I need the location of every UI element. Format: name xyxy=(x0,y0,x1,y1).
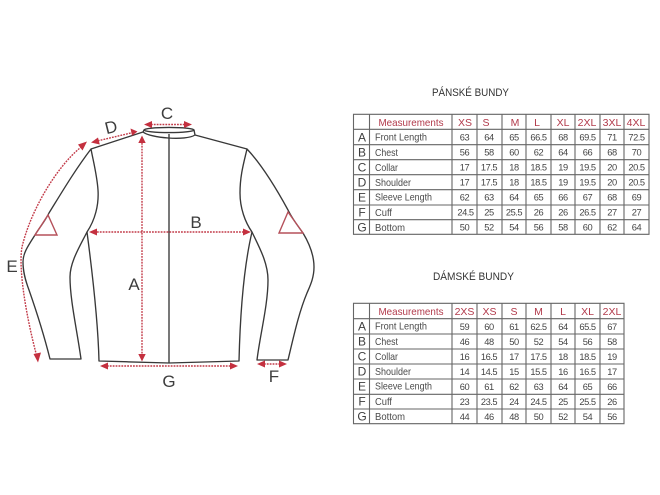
women's row C: 16 xyxy=(460,352,469,362)
men's row D: D xyxy=(358,176,367,190)
men's row C xyxy=(358,160,645,174)
left elbow triangle xyxy=(35,215,57,235)
women's row G: G xyxy=(357,410,367,424)
women's row F: 24.5 xyxy=(530,397,547,407)
women's row F: 23.5 xyxy=(481,397,497,407)
men's row C: 18.5 xyxy=(530,162,547,172)
jacket collar xyxy=(143,127,195,138)
men's header row: Measurements xyxy=(378,117,444,129)
men's row A: 69.5 xyxy=(579,132,596,142)
label D: D xyxy=(103,117,119,138)
women's row B: 54 xyxy=(558,337,568,347)
women's row E: 64 xyxy=(558,382,568,392)
women's row E: 63 xyxy=(534,382,543,392)
jacket right sleeve xyxy=(240,149,314,360)
heading: men's jackets: PÁNSKÉ BUNDY xyxy=(432,86,510,99)
men's header row: XL xyxy=(557,117,570,129)
women's row C: 17 xyxy=(509,352,519,362)
men's row A: A xyxy=(358,130,366,144)
women's row D: 16.5 xyxy=(579,367,596,377)
label B: B xyxy=(190,213,202,232)
men's row G: G xyxy=(357,220,367,234)
women's row G: Bottom xyxy=(375,411,405,423)
men's row E: 69 xyxy=(632,192,641,202)
women's row A: 62.5 xyxy=(530,322,547,332)
women's header row: L xyxy=(560,306,566,318)
table: women's sizes xyxy=(354,303,624,424)
men's row B: 58 xyxy=(484,148,494,158)
women's row F: 24 xyxy=(509,397,519,407)
women's row A: A xyxy=(358,320,366,334)
women's row A xyxy=(358,320,617,334)
men's row F: 26 xyxy=(534,208,543,218)
women's row E: 61 xyxy=(484,382,494,392)
men's row F: F xyxy=(358,206,366,220)
men's row F: Cuff xyxy=(375,207,392,219)
men's row B: Chest xyxy=(375,147,398,159)
women's row B: Chest xyxy=(375,336,398,348)
men's header row: 2XL xyxy=(578,117,596,129)
men's row B: B xyxy=(358,146,366,160)
measurement arrow F: cuff xyxy=(257,360,287,368)
men's row B: 64 xyxy=(558,148,568,158)
jacket front centre line xyxy=(168,134,170,363)
men's row G: 58 xyxy=(558,222,568,232)
women's row F: 23 xyxy=(460,397,469,407)
men's row C: Collar xyxy=(375,162,398,174)
men's row A: 72.5 xyxy=(628,132,645,142)
women's row A: 67 xyxy=(607,322,617,332)
women's row F: 25.5 xyxy=(579,397,596,407)
women's row B: 46 xyxy=(460,337,469,347)
men's row G: 62 xyxy=(607,222,617,232)
women's row F: 25 xyxy=(558,397,568,407)
men's row C: 17.5 xyxy=(481,162,497,172)
men's row G: 52 xyxy=(484,222,494,232)
men's row G: 56 xyxy=(534,222,543,232)
women's row E: 62 xyxy=(509,382,519,392)
men's row D: 20.5 xyxy=(628,178,645,188)
women's row B: 58 xyxy=(607,337,617,347)
women's row F: 26 xyxy=(607,397,617,407)
women's header row: Measurements xyxy=(378,306,444,318)
women's row G: 48 xyxy=(509,412,519,422)
men's row E: 68 xyxy=(607,192,617,202)
men's row D: 18 xyxy=(509,178,519,188)
men's row A: 71 xyxy=(607,132,617,142)
men's header row: L xyxy=(534,117,540,129)
men's row A: 64 xyxy=(484,132,494,142)
measurement arrow D: shoulder xyxy=(91,128,138,144)
men's header row: S xyxy=(482,117,490,129)
women's header row: S xyxy=(510,306,518,318)
men's row B: 68 xyxy=(607,148,617,158)
women's row B: 56 xyxy=(583,337,592,347)
women's row A: 64 xyxy=(558,322,568,332)
men's row D: 17 xyxy=(460,178,469,188)
women's row A: 61 xyxy=(509,322,519,332)
men's row A: 63 xyxy=(460,132,469,142)
label A: A xyxy=(128,275,140,294)
men's row G: 50 xyxy=(460,222,469,232)
men's row C: 20.5 xyxy=(628,162,645,172)
women's row G: 50 xyxy=(534,412,543,422)
men's row A: 66.5 xyxy=(530,132,547,142)
men's row F xyxy=(358,206,641,220)
men's row B: 56 xyxy=(460,148,469,158)
women's row A: 60 xyxy=(484,322,494,332)
women's row F: F xyxy=(358,394,366,408)
women's row E: 66 xyxy=(607,382,617,392)
men's row D: 19 xyxy=(558,178,568,188)
men's header row: 3XL xyxy=(603,117,621,129)
women's header row: XL xyxy=(581,306,594,318)
women's header row: 2XS xyxy=(455,306,474,318)
women's row B: 48 xyxy=(484,337,494,347)
women's row G xyxy=(357,410,617,424)
women's row F xyxy=(358,394,617,408)
men's row D: Shoulder xyxy=(375,177,411,189)
men's header row: 4XL xyxy=(627,117,645,129)
men's row E: Sleeve Length xyxy=(375,192,432,204)
women's row C: 16.5 xyxy=(481,352,497,362)
women's row B: 50 xyxy=(509,337,519,347)
women's row D: 14.5 xyxy=(481,367,497,377)
men's row E: 65 xyxy=(534,192,543,202)
women's row C: C xyxy=(358,350,367,364)
jacket diagram xyxy=(23,127,314,363)
label F: F xyxy=(269,367,279,386)
measurement arrow E: sleeve length xyxy=(21,142,87,362)
women's row D: 15 xyxy=(509,367,519,377)
women's header row: 2XL xyxy=(603,306,621,318)
women's row C: 19 xyxy=(607,352,617,362)
women's row F: Cuff xyxy=(375,396,392,408)
women's header row: XS xyxy=(482,306,497,318)
men's row E: 64 xyxy=(509,192,519,202)
women's row G: 56 xyxy=(607,412,617,422)
women's row B xyxy=(358,334,617,348)
men's row B: 60 xyxy=(509,148,519,158)
women's row G: 46 xyxy=(484,412,494,422)
men's row G: 60 xyxy=(583,222,592,232)
women's row G: 54 xyxy=(583,412,592,422)
men's row G: 64 xyxy=(632,222,641,232)
women's row E: Sleeve Length xyxy=(375,380,432,392)
men's row C: 19.5 xyxy=(579,162,596,172)
women's row C: 18 xyxy=(558,352,568,362)
women's row D: 17 xyxy=(607,367,617,377)
men's row A xyxy=(358,130,645,144)
men's header row xyxy=(378,117,645,129)
women's row G: 52 xyxy=(558,412,568,422)
men's row G: Bottom xyxy=(375,222,405,234)
women's row A: Front Length xyxy=(375,320,427,332)
men's row F: 25.5 xyxy=(506,208,522,218)
men's header row: M xyxy=(511,117,519,129)
measurement arrow G: bottom xyxy=(100,362,238,370)
women's row E xyxy=(358,380,617,394)
men's row A: 65 xyxy=(509,132,519,142)
women's row D: 15.5 xyxy=(530,367,547,377)
women's row B: B xyxy=(358,334,366,348)
men's row C: 19 xyxy=(558,162,568,172)
men's row B xyxy=(358,146,641,160)
men's row A: Front Length xyxy=(375,132,427,144)
men's row D: 17.5 xyxy=(481,178,497,188)
men's row E: 67 xyxy=(583,192,592,202)
men's row F: 26.5 xyxy=(579,208,596,218)
men's row E xyxy=(358,190,641,204)
men's header row: XS xyxy=(458,117,472,129)
men's row D xyxy=(358,176,645,190)
men's row F: 24.5 xyxy=(457,208,474,218)
women's row D: D xyxy=(358,364,367,378)
men's row F: 25 xyxy=(484,208,494,218)
right elbow triangle xyxy=(279,212,303,233)
women's row E: 60 xyxy=(460,382,469,392)
label E: E xyxy=(6,257,18,276)
men's row B: 70 xyxy=(632,148,641,158)
women's row E: E xyxy=(358,380,366,394)
men's row C: 20 xyxy=(607,162,617,172)
measurement arrow B: chest xyxy=(89,228,251,236)
label G: G xyxy=(162,372,176,391)
men's row C: 18 xyxy=(509,162,519,172)
men's row E: 62 xyxy=(460,192,469,202)
label C: C xyxy=(161,104,173,123)
women's row D: 14 xyxy=(460,367,469,377)
men's row D: 19.5 xyxy=(579,178,596,188)
men's row A: 68 xyxy=(558,132,568,142)
measurement arrow C: collar xyxy=(144,121,192,128)
women's row A: 59 xyxy=(460,322,469,332)
women's row B: 52 xyxy=(534,337,543,347)
women's row C: 18.5 xyxy=(579,352,596,362)
jacket left sleeve xyxy=(23,149,98,359)
men's row D: 20 xyxy=(607,178,617,188)
women's row G: 44 xyxy=(460,412,469,422)
women's row C xyxy=(358,350,617,364)
measurement arrow A: front length xyxy=(138,136,146,362)
men's row B: 66 xyxy=(583,148,592,158)
women's row D: Shoulder xyxy=(375,366,411,378)
men's row C: 17 xyxy=(460,162,469,172)
jacket left body and shoulder xyxy=(87,132,252,363)
men's row F: 27 xyxy=(607,208,617,218)
men's row G: 54 xyxy=(509,222,519,232)
heading: women's jackets: DÁMSKÉ BUNDY xyxy=(433,270,515,283)
women's row D xyxy=(358,364,617,378)
women's row C: 17.5 xyxy=(530,352,547,362)
table: men's sizes xyxy=(354,114,649,234)
women's header row: M xyxy=(534,306,543,318)
women's header row xyxy=(378,306,621,318)
men's row E: E xyxy=(358,190,366,204)
men's row C: C xyxy=(358,160,367,174)
women's row E: 65 xyxy=(583,382,592,392)
men's row F: 27 xyxy=(632,208,641,218)
men's row F: 26 xyxy=(558,208,568,218)
men's row E: 66 xyxy=(558,192,568,202)
men's row G xyxy=(357,220,641,234)
men's row E: 63 xyxy=(484,192,494,202)
women's row D: 16 xyxy=(558,367,568,377)
men's row B: 62 xyxy=(534,148,543,158)
women's row C: Collar xyxy=(375,351,398,363)
men's row D: 18.5 xyxy=(530,178,547,188)
women's row A: 65.5 xyxy=(579,322,596,332)
